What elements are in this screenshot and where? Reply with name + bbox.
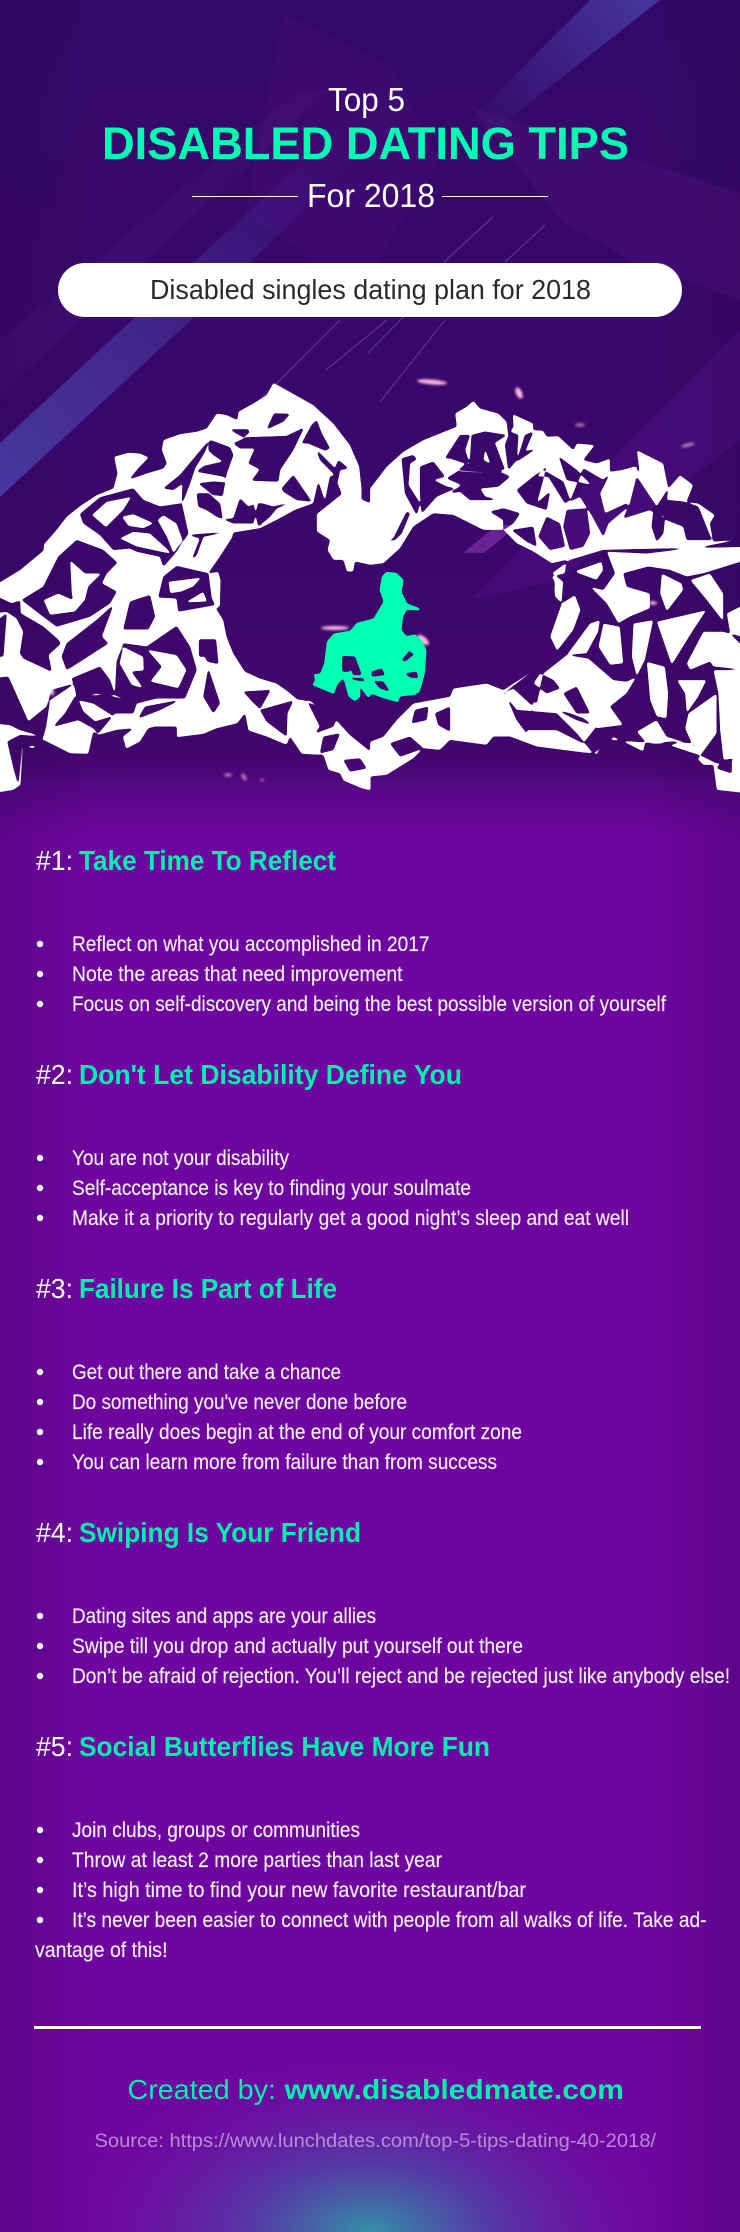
section 1: Take Time To Reflect [36, 845, 666, 1016]
bullet list 5: Join clubs, groups or communities [72, 1819, 360, 1842]
heading 2: #2: [36, 1059, 73, 1090]
heading: Disabled Dating Tips: DISABLED DATING TIPS [102, 118, 629, 169]
heading: For 2018 with side rules: For 2018 [307, 177, 435, 214]
bullet list 3 [37, 1361, 522, 1474]
bullet list 1: Note the areas that need improvement [72, 963, 403, 986]
heading 4: Swiping Is Your Friend [79, 1517, 361, 1548]
section 3: Failure Is Part of Life [36, 1273, 522, 1474]
bullet list 2: You are not your disability [72, 1147, 289, 1170]
heading 1: Take Time To Reflect [79, 845, 336, 876]
bullet list 4 [37, 1605, 730, 1688]
bullet list 2: Self-acceptance is key to finding your soulmate [72, 1177, 471, 1200]
bullet list 5: vantage of this! [35, 1939, 168, 1962]
bullet list 3: Do something you've never done before [72, 1391, 407, 1414]
subtitle pill: Disabled singles dating plan for 2018 [150, 274, 591, 305]
bullet list 1: Focus on self-discovery and being the best possible version of yourself [72, 993, 666, 1016]
credit line: Created by: [128, 2074, 276, 2105]
bullet list 3: Life really does begin at the end of your comfort zone [72, 1421, 522, 1444]
bullet list 2 [37, 1147, 629, 1230]
heart hands illustration [0, 383, 740, 793]
bullet list 4: Dating sites and apps are your allies [72, 1605, 376, 1628]
heading 2: Don't Let Disability Define You [79, 1059, 462, 1090]
heading 5: #5: [36, 1731, 73, 1762]
subtitle pill [58, 263, 682, 317]
bullet list 5: Throw at least 2 more parties than last year [72, 1849, 442, 1872]
left hand [0, 383, 371, 793]
heading 1: #1: [36, 845, 73, 876]
footer [34, 2026, 701, 2152]
right hand [370, 401, 740, 793]
section 2: Don't Let Disability Define You [36, 1059, 629, 1230]
heading 3: Failure Is Part of Life [79, 1273, 337, 1304]
bullet list 1: Reflect on what you accomplished in 2017 [72, 933, 430, 956]
credit line: www.disabledmate.com [283, 2074, 624, 2105]
bullet list 3: Get out there and take a chance [72, 1361, 341, 1384]
heading: Top 5: Top 5 [328, 81, 405, 118]
heading 5: Social Butterflies Have More Fun [79, 1731, 490, 1762]
bullet list 5: It’s high time to find your new favorite restaurant/bar [72, 1879, 526, 1902]
bullet list 2: Make it a priority to regularly get a good night’s sleep and eat well [72, 1207, 629, 1230]
bullet list 1 [37, 933, 666, 1016]
source line: Source: https://www.lunchdates.com/top-5-tips-dating-40-2018/ [94, 2131, 657, 2152]
heading 3: #3: [36, 1273, 73, 1304]
bullet list 4: Swipe till you drop and actually put yourself out there [72, 1635, 523, 1658]
title [102, 81, 629, 214]
bullet list 3: You can learn more from failure than from success [72, 1451, 497, 1474]
bullet list 5 [35, 1819, 706, 1962]
section 4: Swiping Is Your Friend [36, 1517, 730, 1688]
section 5: Social Butterflies Have More Fun [35, 1731, 706, 1962]
credit line [128, 2074, 624, 2105]
icon: wheelchair silhouette [312, 572, 427, 703]
sparks [44, 378, 732, 782]
heading 4: #4: [36, 1517, 73, 1548]
